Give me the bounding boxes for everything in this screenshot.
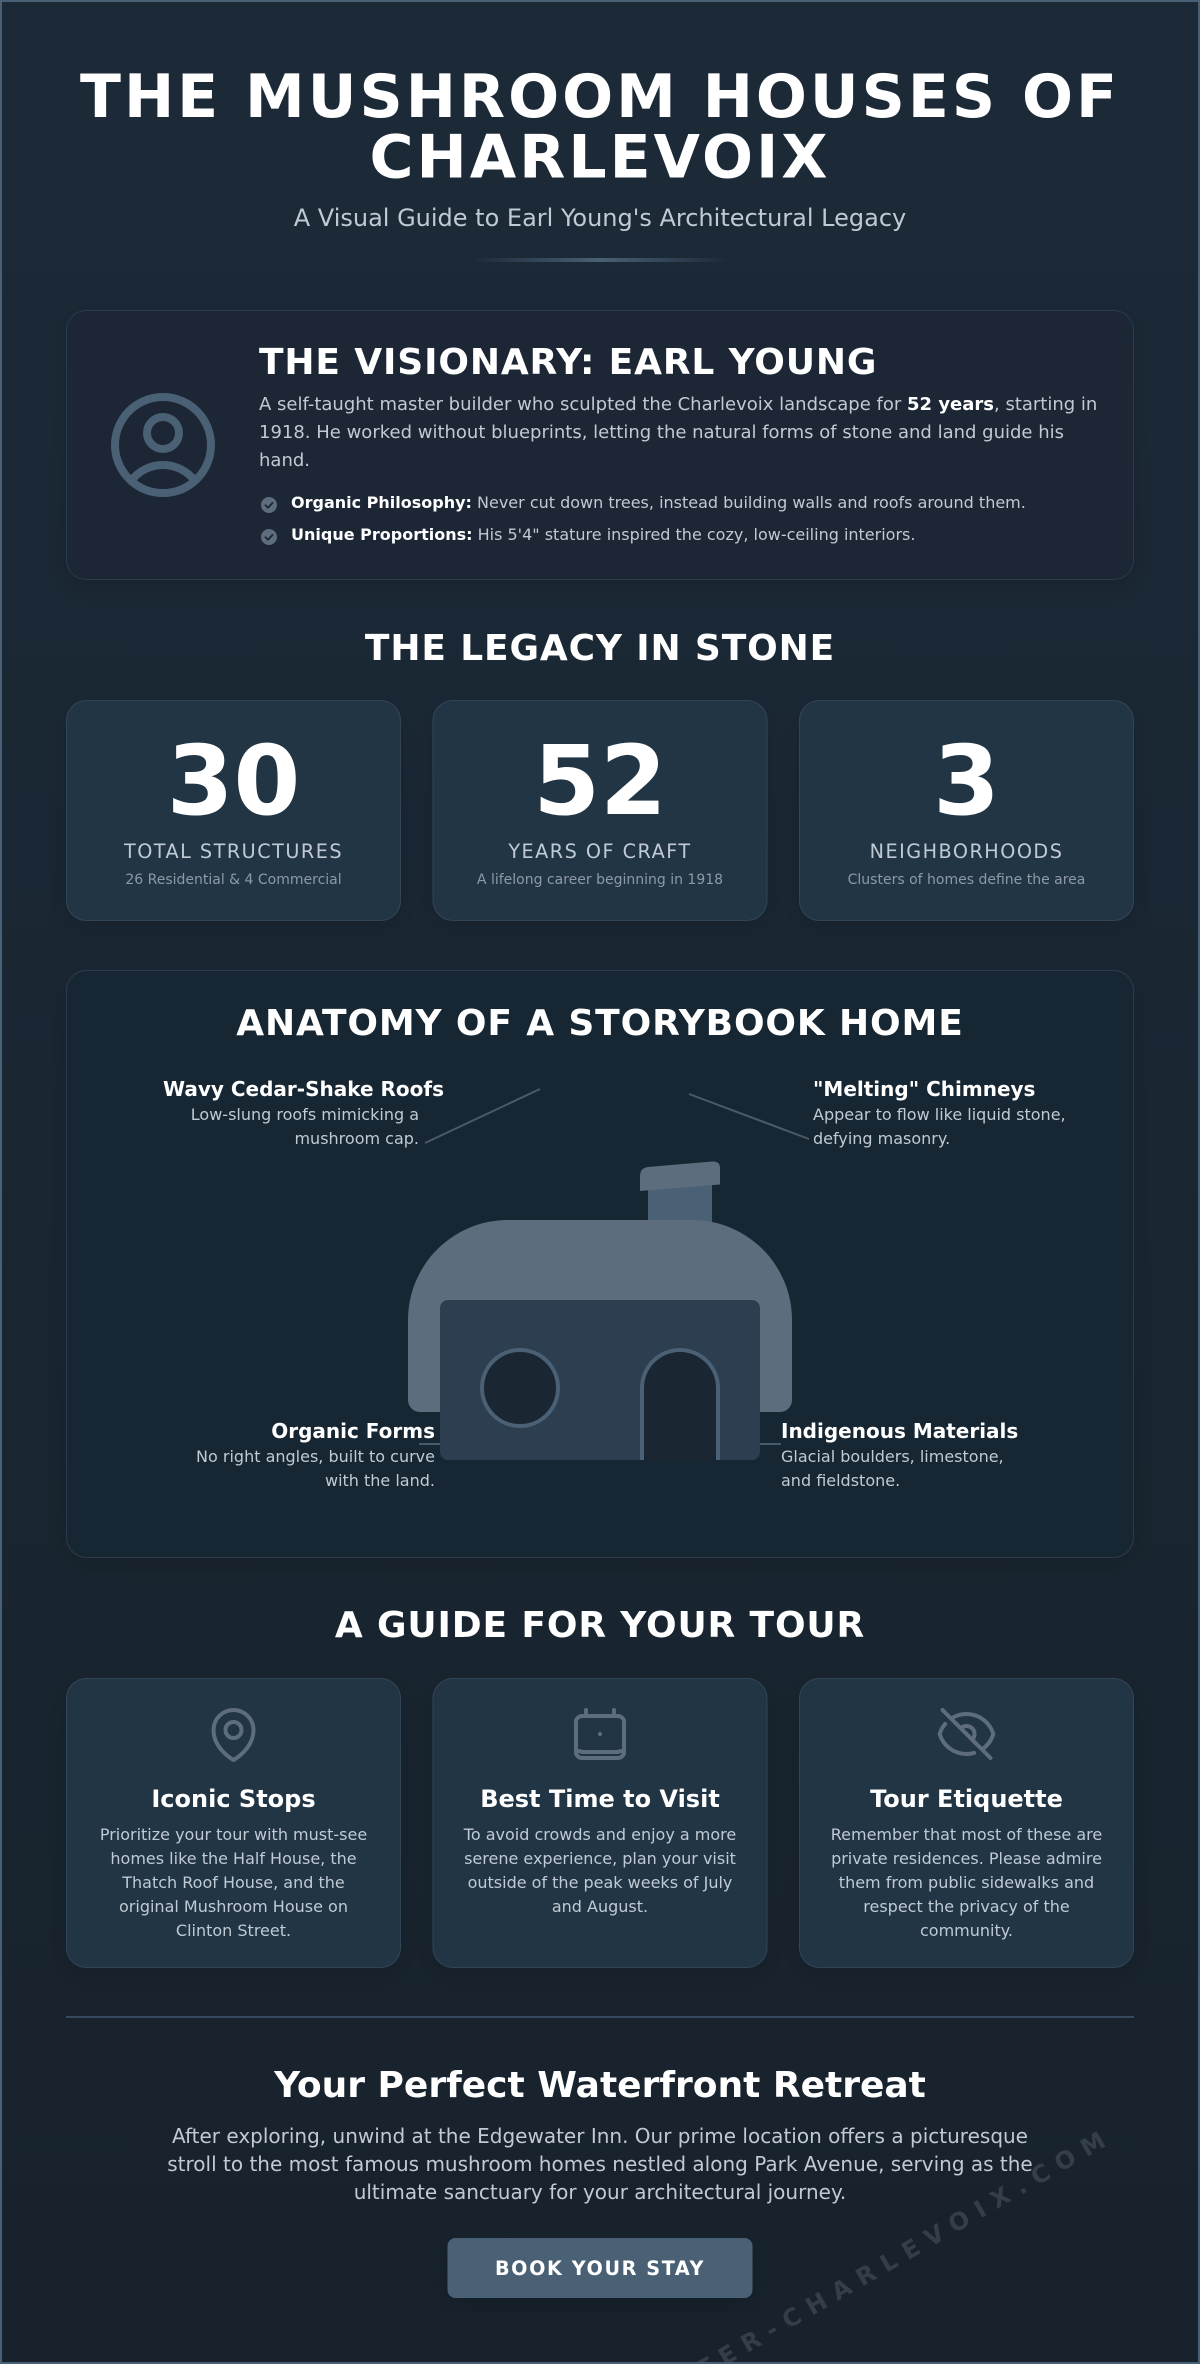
icon: calendar [576,1710,624,1758]
callout line: materials [759,1443,781,1445]
heading: legacy: THE LEGACY IN STONE [365,628,835,669]
walls [440,1300,760,1460]
callout: materials: Indigenous Materials [781,1419,1018,1443]
title: CHARLEVOIX [369,122,831,192]
callout: chimneys: defying masonry. [813,1129,950,1148]
callout: roofs [163,1077,444,1148]
visionary text: hand. [259,450,310,471]
callout: roofs: Low-slung roofs mimicking a [191,1105,419,1124]
callout: roofs: Wavy Cedar-Shake Roofs [163,1077,444,1101]
guide card: etiquette: private residences. Please admire [831,1849,1102,1868]
stat card: structures: 30 [167,725,300,837]
stat card: neighborhoods [800,700,1134,920]
guide card: best time: outside of the peak weeks of July [468,1873,732,1892]
button: BOOK YOUR STAY [495,2257,705,2280]
callout: forms [196,1419,435,1490]
guide card: iconic stops: Clinton Street. [176,1921,291,1940]
panel: anatomy [66,970,1134,1558]
callout line: chimneys [689,1094,809,1139]
footer text: ultimate sanctuary for your architectural journey. [354,2180,846,2204]
callout: chimneys: Appear to flow like liquid stone, [813,1105,1066,1124]
anatomy heading: ANATOMY OF A STORYBOOK HOME [236,1003,964,1044]
guide card: etiquette [800,1678,1134,1968]
guide card: etiquette: Tour Etiquette [870,1785,1063,1813]
heading: guide: A GUIDE FOR YOUR TOUR [335,1605,865,1646]
callout: chimneys: "Melting" Chimneys [813,1077,1035,1101]
guide card: best time: To avoid crowds and enjoy a more [463,1825,736,1844]
window [482,1350,558,1426]
guide card: best time: Best Time to Visit [480,1785,720,1813]
guide card: iconic stops: homes like the Half House, the [110,1849,357,1868]
stat card: years: YEARS OF CRAFT [507,840,692,863]
guide card: iconic stops: Prioritize your tour with must-see [100,1825,367,1844]
callout: chimneys [813,1077,1066,1148]
stat card: neighborhoods: Clusters of homes define the area [848,872,1085,888]
stat card: neighborhoods: 3 [933,725,1000,837]
header [80,62,1120,262]
chimney cap [640,1161,720,1191]
callout: materials [781,1419,1018,1490]
guide card: iconic stops: Thatch Roof House, and the [121,1873,345,1892]
callout line: roofs [425,1089,540,1143]
footer text: stroll to the most famous mushroom homes nestled along Park Avenue, serving as the [167,2152,1033,2176]
guide card: iconic stops: Iconic Stops [151,1785,316,1813]
visionary text: A self-taught master builder who sculpted the Charlevoix landscape for 52 years, starting in [259,394,1097,415]
subtitle: A Visual Guide to Earl Young's Architectural Legacy [294,204,906,232]
footer heading: Your Perfect Waterfront Retreat [273,2065,926,2106]
guide card: etiquette: Remember that most of these are [831,1825,1102,1844]
footer text: After exploring, unwind at the Edgewater Inn. Our prime location offers a picturesque [172,2124,1028,2148]
footer: retreat [167,2065,1033,2298]
visionary text: 1918. He worked without blueprints, letting the natural forms of stone and land guide his [259,422,1064,443]
footer divider [66,2016,1134,2018]
guide card: iconic stops: original Mushroom House on [119,1897,348,1916]
roof [408,1220,792,1412]
stat card: years: A lifelong career beginning in 1918 [477,872,723,888]
title [80,62,1120,192]
title: THE MUSHROOM HOUSES OF [80,62,1120,132]
guide card: best time [433,1678,767,1968]
door [640,1348,720,1460]
callout: materials: Glacial boulders, limestone, [781,1447,1004,1466]
callout: forms: Organic Forms [271,1419,435,1443]
stat card: neighborhoods: NEIGHBORHOODS [870,840,1063,863]
stat card: structures: 26 Residential & 4 Commercial [125,872,342,888]
guide card: best time: and August. [552,1897,648,1916]
stat card: structures [66,700,400,920]
guide card: etiquette: them from public sidewalks and [839,1873,1094,1892]
guide card: etiquette: respect the privacy of the [863,1897,1070,1916]
header rule [470,258,730,262]
icon: person [115,397,211,493]
stat card: years [433,700,767,920]
panel: the visionary [66,310,1134,580]
callout line: forms [419,1443,441,1445]
stat card: years: 52 [533,725,667,837]
guide card: etiquette: community. [920,1921,1013,1940]
guide card: iconic stops [66,1678,400,1968]
chimney [648,1180,712,1224]
callout: materials: and fieldstone. [781,1471,900,1490]
button [448,2238,752,2298]
guide card: best time: serene experience, plan your visit [464,1849,736,1868]
stat card: structures: TOTAL STRUCTURES [123,840,343,863]
callout: forms: No right angles, built to curve [196,1447,435,1466]
visionary heading: THE VISIONARY: EARL YOUNG [259,342,877,383]
icon: map pin [214,1710,254,1760]
callout: roofs: mushroom cap. [294,1129,419,1148]
callout: forms: with the land. [325,1471,435,1490]
list item: organic philosophy: Organic Philosophy: Never cut down trees, instead building walls and roofs around them. [291,493,1026,512]
illustration: mushroom house [408,1161,792,1460]
icon: eye slash [940,1710,993,1758]
list item: unique proportions: Unique Proportions: His 5'4" stature inspired the cozy, low-ceiling interiors. [291,525,915,544]
